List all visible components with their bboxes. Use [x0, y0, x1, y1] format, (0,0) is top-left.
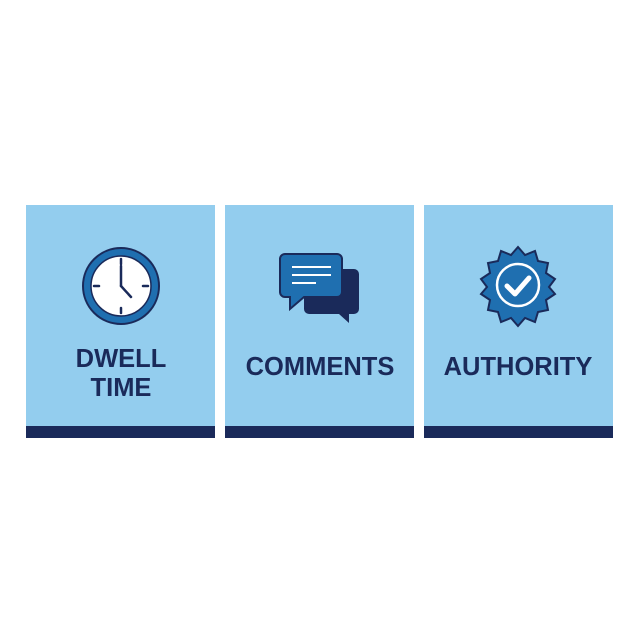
- panel: comments: [225, 205, 414, 438]
- panel: dwell time: [26, 205, 215, 438]
- heading: authority: AUTHORITY: [444, 353, 592, 381]
- heading: time: TIME: [91, 374, 151, 402]
- panel: authority: [424, 205, 613, 438]
- icon: chat bubbles: [280, 254, 359, 323]
- heading: dwell time: DWELL: [76, 345, 166, 373]
- icon: clock: [83, 248, 159, 324]
- heading: comments: COMMENTS: [246, 353, 394, 381]
- icon: verified badge: [481, 247, 555, 326]
